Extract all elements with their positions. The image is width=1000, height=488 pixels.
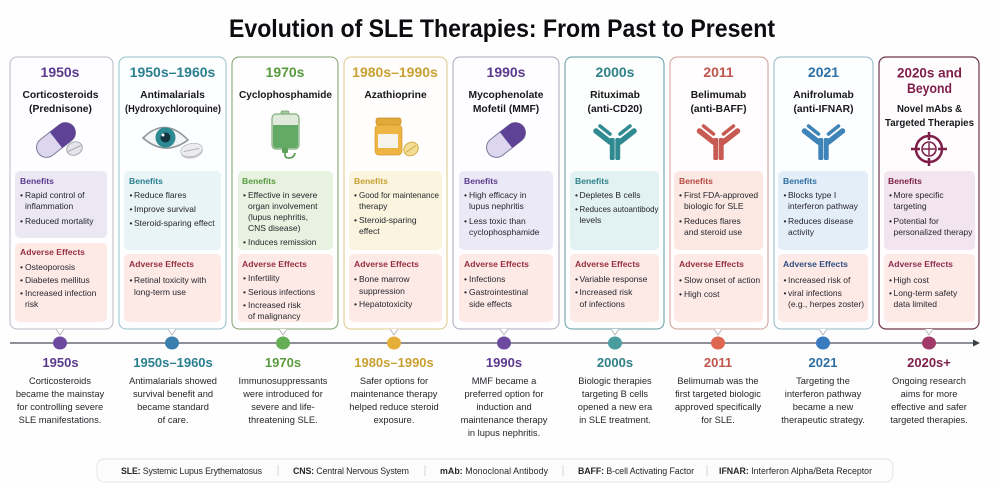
drug name: [885, 104, 974, 129]
icon: capsule: [483, 119, 529, 161]
benefits box: •: [243, 237, 246, 247]
benefits box: •: [575, 204, 578, 214]
benefits box: Benefits: [575, 176, 609, 186]
adverse effects box: Variable response: [580, 274, 648, 284]
adverse effects box: suppression: [359, 286, 405, 296]
icon: antibody: [804, 126, 842, 160]
adverse effects box: Adverse Effects: [783, 259, 848, 269]
benefits box: [15, 171, 107, 238]
benefits box: •: [889, 190, 892, 200]
milestone: 1980s-1990s: exposure.: [374, 415, 414, 425]
abbreviations legend: mAb: Monoclonal Antibody: [440, 466, 549, 476]
adverse effects box: Diabetes mellitus: [25, 275, 90, 285]
adverse effects box: risk: [25, 299, 39, 309]
milestone: 2000s: in SLE treatment.: [579, 415, 651, 425]
adverse effects box: of malignancy: [248, 311, 301, 321]
adverse effects box: •: [464, 287, 467, 297]
milestone: 1970s: Immunosuppressants: [239, 376, 328, 386]
adverse effects box: [124, 254, 221, 322]
drug name: (Hydroxychloroquine): [125, 104, 221, 115]
adverse effects box: •: [243, 287, 246, 297]
benefits box: Less toxic than: [469, 216, 526, 226]
drug name: Targeted Therapies: [885, 118, 974, 129]
adverse effects box: (e.g., herpes zoster): [788, 299, 864, 309]
benefits box: Benefits: [679, 176, 713, 186]
adverse effects box: •: [243, 273, 246, 283]
adverse effects box: Adverse Effects: [242, 259, 307, 269]
milestone: 2000s: 2000s: [597, 355, 633, 370]
milestone: 2011: for SLE.: [701, 415, 735, 425]
icon: pill bottle and tablet: [375, 118, 421, 159]
milestone: 1950s-1960s: became standard: [137, 402, 209, 412]
year heading: 1980s–1990s: [352, 64, 438, 80]
benefits box: Reduced mortality: [25, 216, 94, 226]
panel: belimumab 2011: [670, 57, 768, 329]
adverse effects box: High cost: [894, 275, 930, 285]
icon: target: [911, 132, 947, 166]
adverse effects box: Increased infection: [25, 288, 97, 298]
drug name: Rituximab: [590, 90, 640, 101]
adverse effects box: Hepatotoxicity: [359, 299, 413, 309]
benefits box: [349, 171, 442, 250]
benefits box: inflammation: [25, 201, 73, 211]
benefits box: Reduces flares: [684, 216, 741, 226]
benefits box: •: [20, 190, 23, 200]
milestone: 1990s: MMF became a: [472, 376, 537, 386]
benefits box: Reduces autoantibody: [580, 204, 659, 214]
icon: capsule and tablet: [33, 119, 84, 161]
benefits box: Benefits: [888, 176, 922, 186]
benefits box: •: [354, 215, 357, 225]
adverse effects box: Adverse Effects: [20, 247, 85, 257]
year heading: Beyond: [907, 80, 952, 96]
benefits box: Benefits: [20, 176, 54, 186]
benefits box: [778, 171, 868, 250]
benefits box: •: [20, 216, 23, 226]
adverse effects box: Serious infections: [248, 287, 315, 297]
milestone: 2021: Targeting the: [796, 376, 850, 386]
adverse effects box: [349, 254, 442, 322]
milestone: 1950s: Corticosteroids: [29, 376, 91, 386]
milestone: 2000s: [578, 355, 653, 425]
adverse effects box: •: [575, 274, 578, 284]
milestone: 1950s: SLE manifestations.: [19, 415, 101, 425]
milestone: 1980s-1990s: maintenance therapy: [351, 389, 438, 399]
adverse effects box: Adverse Effects: [575, 259, 640, 269]
adverse effects box: •: [243, 300, 246, 310]
milestone: 1990s: preferred option for: [464, 389, 544, 399]
adverse effects box: •: [889, 288, 892, 298]
milestone: 2000s: targeting B cells: [582, 389, 648, 399]
milestone: 2021: therapeutic strategy.: [781, 415, 865, 425]
drug name: (anti-IFNAR): [793, 104, 854, 115]
milestone: 1970s: 1970s: [265, 355, 301, 370]
adverse effects box: of infections: [580, 299, 625, 309]
benefits box: CNS disease): [248, 223, 301, 233]
benefits box: Good for maintenance: [359, 190, 439, 200]
milestone: 1950s: [16, 355, 105, 425]
milestone: 1990s: 1990s: [486, 355, 522, 370]
benefits box: organ involvement: [248, 201, 318, 211]
milestone: 1970s: severe and life-: [251, 402, 315, 412]
adverse effects box: Slow onset of action: [684, 275, 760, 285]
benefits box: Improve survival: [134, 204, 196, 214]
adverse effects box: •: [679, 275, 682, 285]
icon: IV bag: [272, 111, 299, 158]
benefits box: therapy: [359, 201, 388, 211]
benefits box: Effective in severe: [248, 190, 318, 200]
adverse effects box: viral infections: [788, 288, 842, 298]
milestone: 2020s+: 2020s+: [907, 355, 951, 370]
adverse effects box: Bone marrow: [359, 274, 410, 284]
drug name: Belimumab: [691, 90, 746, 101]
milestone: 1980s-1990s: [349, 355, 439, 425]
benefits box: •: [889, 216, 892, 226]
benefits box: Steroid-sparing: [359, 215, 417, 225]
adverse effects box: Increased risk of: [788, 275, 851, 285]
milestone: 2011: first targeted biologic: [675, 389, 761, 399]
benefits box: [674, 171, 763, 250]
benefits box: biologic for SLE: [684, 201, 744, 211]
year heading: 2021: [808, 64, 839, 80]
drug name: (anti-BAFF): [690, 104, 747, 115]
year heading: [897, 64, 962, 96]
benefits box: activity: [788, 227, 815, 237]
panel: anifrolumab 2021: [774, 57, 873, 329]
drug name: Cyclophosphamide: [239, 90, 332, 101]
milestone: 1970s: were introduced for: [242, 389, 323, 399]
benefits box: [570, 171, 659, 250]
panel: novel therapies 2020s and beyond: [879, 57, 979, 329]
benefits box: •: [464, 190, 467, 200]
milestone: 2011: 2011: [704, 355, 732, 370]
benefits box: (lupus nephritis,: [248, 212, 308, 222]
milestone: 1950s-1960s: of care.: [157, 415, 189, 425]
benefits box: •: [130, 218, 132, 228]
adverse effects box: Retinal toxicity with: [134, 275, 207, 285]
adverse effects box: •: [354, 274, 357, 284]
panel: mycophenolate mofetil 1990s: [453, 57, 559, 329]
milestone: 1950s: for controlling severe: [17, 402, 103, 412]
panel: azathioprine 1980s-1990s: [344, 57, 447, 329]
panel: antimalarials 1950s-1960s: [119, 57, 226, 329]
adverse effects box: •: [784, 275, 786, 285]
timeline markers: [53, 336, 936, 350]
adverse effects box: •: [20, 288, 23, 298]
benefits box: Benefits: [783, 176, 817, 186]
milestone: 1990s: in lupus nephritis.: [468, 428, 540, 438]
year heading: 1970s: [266, 64, 305, 80]
benefits box: •: [679, 216, 682, 226]
milestone: 2020s+: aims for more: [901, 389, 957, 399]
abbreviations legend: [97, 459, 893, 482]
adverse effects box: Infertility: [248, 273, 280, 283]
benefits box: Potential for: [894, 216, 939, 226]
adverse effects box: Increased risk: [580, 287, 633, 297]
benefits box: Benefits: [464, 176, 498, 186]
adverse effects box: Adverse Effects: [354, 259, 419, 269]
adverse effects box: [674, 254, 763, 322]
title: Evolution of SLE Therapies: From Past to Present: [229, 15, 776, 43]
milestone: 2021: 2021: [809, 355, 837, 370]
benefits box: Blocks type I: [788, 190, 836, 200]
milestone: 2020s+: Ongoing research: [892, 376, 966, 386]
milestone: 1980s-1990s: Safer options for: [360, 376, 428, 386]
milestone: 1950s-1960s: Antimalarials showed: [129, 376, 217, 386]
milestone: 1980s-1990s: 1980s–1990s: [354, 355, 434, 370]
adverse effects box: data limited: [894, 299, 937, 309]
adverse effects box: •: [575, 287, 578, 297]
milestone: 2000s: opened a new era: [578, 402, 653, 412]
milestone: 2000s: Biologic therapies: [578, 376, 652, 386]
benefits box: Rapid control of: [25, 190, 85, 200]
benefits box: Reduce flares: [134, 190, 186, 200]
benefits box: •: [784, 190, 786, 200]
adverse effects box: High cost: [684, 289, 720, 299]
adverse effects box: Increased risk: [248, 300, 302, 310]
adverse effects box: •: [679, 289, 682, 299]
benefits box: [459, 171, 553, 250]
milestone: 1950s-1960s: survival benefit and: [133, 389, 213, 399]
benefits box: [124, 171, 221, 250]
milestone: 1950s: became the mainstay: [16, 389, 105, 399]
benefits box: targeting: [894, 201, 927, 211]
adverse effects box: Long-term safety: [894, 288, 958, 298]
benefits box: •: [464, 216, 467, 226]
panel: rituximab 2000s: [565, 57, 664, 329]
benefits box: •: [679, 190, 682, 200]
benefits box: High efficacy in: [469, 190, 527, 200]
milestone: 2020s+: [890, 355, 968, 425]
benefits box: Reduces disease: [788, 216, 853, 226]
benefits box: Benefits: [242, 176, 276, 186]
adverse effects box: [778, 254, 868, 322]
benefits box: interferon pathway: [788, 201, 859, 211]
milestone: 2011: approved specifically: [675, 402, 761, 412]
icon: eye and tablet: [143, 127, 204, 161]
icon: antibody: [700, 126, 738, 160]
benefits box: Benefits: [354, 176, 388, 186]
year heading: 2011: [703, 64, 734, 80]
benefits box: Steroid-sparing effect: [134, 218, 215, 228]
drug name: (Prednisone): [29, 104, 92, 115]
icon: antibody: [596, 126, 634, 160]
benefits box: effect: [359, 226, 380, 236]
adverse effects box: •: [889, 275, 892, 285]
panel: cyclophosphamide 1970s: [232, 57, 338, 329]
benefits box: levels: [580, 215, 601, 225]
adverse effects box: [459, 254, 553, 322]
benefits box: and steroid use: [684, 227, 742, 237]
year heading: 2020s and: [897, 64, 962, 80]
adverse effects box: [884, 254, 975, 322]
benefits box: Induces remission: [248, 237, 317, 247]
adverse effects box: •: [784, 288, 786, 298]
benefits box: Depletes B cells: [580, 190, 640, 200]
milestone: 1990s: maintenance therapy: [461, 415, 548, 425]
milestone: 1970s: threatening SLE.: [248, 415, 318, 425]
timeline axis and arrow: [10, 329, 980, 346]
benefits box: First FDA-approved: [684, 190, 758, 200]
drug name: Mycophenolate: [469, 90, 544, 101]
adverse effects box: •: [20, 275, 23, 285]
milestone: 2020s+: effective and safer: [891, 402, 967, 412]
adverse effects box: side effects: [469, 299, 512, 309]
drug name: Mofetil (MMF): [473, 104, 539, 115]
benefits box: personalized therapy: [894, 227, 973, 237]
milestone: 1950s-1960s: 1950s–1960s: [133, 355, 213, 370]
milestone: 2021: [781, 355, 865, 425]
adverse effects box: Adverse Effects: [888, 259, 953, 269]
adverse effects box: Osteoporosis: [25, 262, 75, 272]
milestone: 2011: [675, 355, 761, 425]
drug name: Azathioprine: [364, 90, 427, 101]
adverse effects box: [15, 243, 107, 322]
abbreviations legend: IFNAR: Interferon Alpha/Beta Receptor: [719, 466, 872, 476]
adverse effects box: •: [354, 299, 357, 309]
benefits box: More specific: [894, 190, 944, 200]
adverse effects box: •: [130, 275, 132, 285]
adverse effects box: [238, 254, 333, 322]
year heading: 1950s–1960s: [130, 64, 216, 80]
milestone: 2021: interferon pathway: [785, 389, 862, 399]
year heading: 1950s: [41, 64, 80, 80]
adverse effects box: Adverse Effects: [129, 259, 194, 269]
abbreviations legend: SLE: Systemic Lupus Erythematosus: [121, 466, 263, 476]
drug name: Anifrolumab: [793, 90, 854, 101]
milestone: 1990s: [461, 355, 548, 438]
milestone: 1950s: 1950s: [42, 355, 79, 370]
milestone: 1950s-1960s: [129, 355, 217, 425]
drug name: Novel mAbs &: [897, 104, 963, 115]
panel: corticosteroids 1950s: [10, 57, 113, 329]
adverse effects box: Adverse Effects: [679, 259, 744, 269]
benefits box: lupus nephritis: [469, 201, 524, 211]
adverse effects box: •: [20, 262, 23, 272]
adverse effects box: Gastrointestinal: [469, 287, 528, 297]
benefits box: •: [130, 190, 132, 200]
benefits box: •: [130, 204, 132, 214]
adverse effects box: Infections: [469, 274, 505, 284]
milestone: 1990s: induction and: [476, 402, 532, 412]
year heading: 2000s: [596, 64, 635, 80]
drug name: [125, 90, 221, 115]
abbreviations legend: BAFF: B-cell Activating Factor: [578, 466, 694, 476]
adverse effects box: [570, 254, 659, 322]
drug name: (anti-CD20): [588, 104, 642, 115]
benefits box: •: [784, 216, 786, 226]
adverse effects box: Adverse Effects: [464, 259, 529, 269]
benefits box: [884, 171, 975, 250]
milestone: 2021: became a new: [793, 402, 854, 412]
adverse effects box: long-term use: [134, 287, 186, 297]
benefits box: [238, 171, 333, 250]
milestone: 1980s-1990s: helped reduce steroid: [349, 402, 439, 412]
benefits box: •: [243, 190, 246, 200]
drug name: Antimalarials: [140, 90, 205, 101]
milestone: 2020s+: targeted therapies.: [890, 415, 968, 425]
benefits box: Benefits: [129, 176, 163, 186]
milestone: 1970s: [239, 355, 328, 425]
drug name: Corticosteroids: [22, 90, 99, 101]
benefits box: cyclophosphamide: [469, 227, 540, 237]
benefits box: •: [575, 190, 578, 200]
adverse effects box: •: [464, 274, 467, 284]
benefits box: •: [354, 190, 357, 200]
abbreviations legend: CNS: Central Nervous System: [293, 466, 409, 476]
milestone: 2011: Belimumab was the: [677, 376, 759, 386]
year heading: 1990s: [487, 64, 526, 80]
